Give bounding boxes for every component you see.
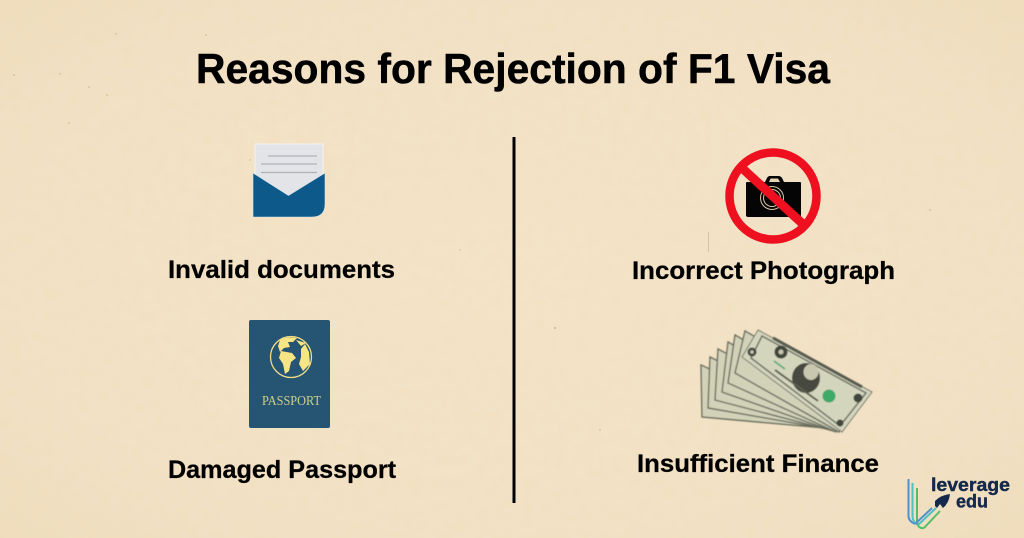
title: Reasons for Rejection of F1 Visa: [196, 45, 831, 92]
logo: leverage edu: [908, 475, 1010, 528]
icon: open envelope with document: [253, 144, 325, 217]
icon: fan of dollar bills: [701, 330, 872, 432]
label: insufficient finance: Insufficient Finance: [637, 450, 879, 478]
divider: [512, 137, 516, 503]
label: incorrect photograph: Incorrect Photograph: [632, 257, 895, 285]
label: damaged passport: Damaged Passport: [168, 456, 397, 484]
logo: leverage edu: leverage: [931, 475, 1010, 495]
logo: leverage edu: edu: [956, 492, 988, 512]
icon: passport: PASSPORT: [262, 393, 322, 408]
label: invalid documents: Invalid documents: [168, 256, 395, 284]
icon: no photography sign: [730, 152, 816, 240]
icon: passport: [249, 320, 330, 428]
